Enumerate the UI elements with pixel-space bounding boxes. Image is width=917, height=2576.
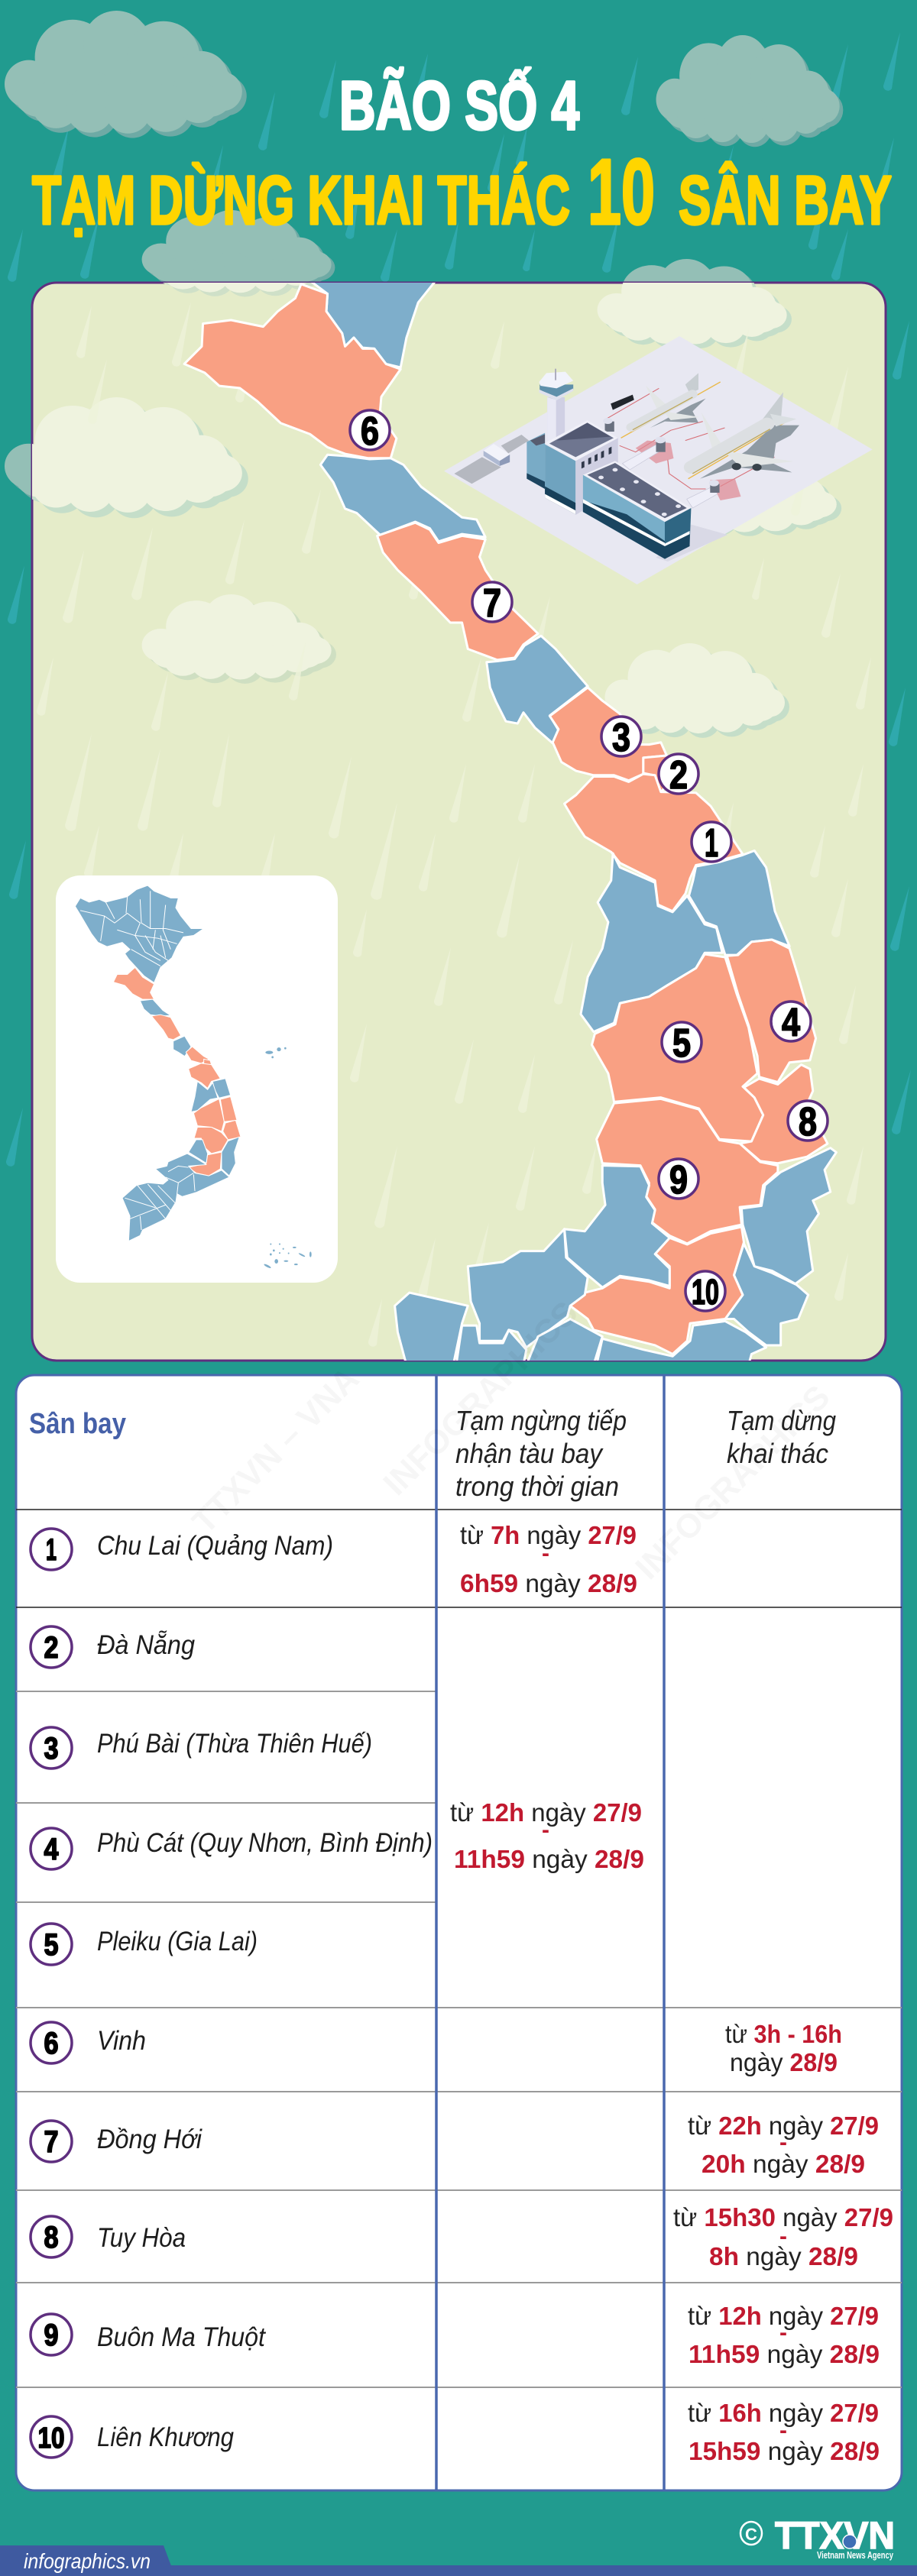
row 8: Tuy Hòa bbox=[97, 2223, 186, 2253]
row 7 bbox=[31, 2121, 203, 2162]
row 2: 2 bbox=[44, 1631, 58, 1665]
badge 7 bbox=[472, 581, 512, 626]
cloud: top left bbox=[5, 11, 247, 138]
badge 4 bbox=[771, 1001, 811, 1045]
badge 3 bbox=[601, 716, 641, 760]
row 4: Phù Cát (Quy Nhơn, Bình Định) bbox=[97, 1828, 433, 1858]
time: Dong Hoi: - bbox=[779, 2130, 787, 2155]
inset Quang Tri bbox=[173, 1036, 191, 1057]
table watermarks bbox=[185, 1294, 838, 1587]
time: Lien Khuong: - bbox=[779, 2418, 787, 2443]
title bbox=[32, 66, 892, 244]
row 5: 5 bbox=[44, 1928, 58, 1962]
inset north blue bbox=[75, 885, 204, 982]
badge 9: 9 bbox=[669, 1158, 688, 1202]
row 1: 1 bbox=[46, 1533, 57, 1567]
teal rain drops bbox=[6, 32, 911, 1167]
inset Spratly islands bbox=[264, 1243, 312, 1269]
time: Buon Ma Thuot: 11h59 ngày 28/9 bbox=[689, 2340, 880, 2368]
header: column 2 bbox=[455, 1405, 627, 1502]
small building bbox=[484, 444, 510, 466]
province blue Kon Tum bbox=[581, 853, 722, 1032]
airport illustration bbox=[444, 336, 873, 584]
jet bridges bbox=[622, 443, 718, 508]
time: Dong Hoi: 20h ngày 28/9 bbox=[702, 2150, 865, 2178]
inset Hue bbox=[186, 1047, 209, 1063]
inset Lam Dong bbox=[189, 1152, 222, 1176]
province orange Gia Lai bbox=[591, 954, 763, 1141]
copyright mark bbox=[740, 2522, 762, 2545]
badge 6 bbox=[350, 409, 390, 454]
time: Vinh bbox=[725, 2020, 842, 2076]
time: group of four airports: từ 12h ngày 27/9 bbox=[450, 1798, 642, 1827]
row 9: 9 bbox=[44, 2319, 58, 2352]
inset Nghe An bbox=[113, 967, 154, 999]
bus bbox=[611, 395, 634, 410]
airport apron bbox=[444, 336, 873, 584]
parking strips bbox=[501, 435, 529, 453]
inset: Vietnam overview map bbox=[56, 875, 338, 1283]
time: Chu Lai: 6h59 ngày 28/9 bbox=[460, 1569, 637, 1597]
row 6 bbox=[31, 2022, 146, 2063]
province orange Lam Dong bbox=[570, 1227, 744, 1354]
row 4: 4 bbox=[44, 1833, 59, 1866]
time: Lien Khuong bbox=[688, 2399, 880, 2465]
header: column 3: Tạm dừng bbox=[727, 1405, 836, 1436]
time: Chu Lai bbox=[460, 1521, 637, 1597]
province orange Nghe An bbox=[184, 284, 400, 458]
logo wordmark: TTXVN bbox=[775, 2514, 895, 2557]
inset Gia Lai bbox=[193, 1099, 224, 1131]
badge 1: 1 bbox=[705, 821, 718, 866]
lower provinces bbox=[395, 688, 836, 1365]
panel: map background bbox=[32, 283, 886, 1361]
time: Buon Ma Thuot bbox=[688, 2302, 880, 2368]
province blue Quang Ngai bbox=[689, 851, 789, 955]
header: column 2: nhận tàu bay bbox=[455, 1438, 604, 1469]
row 8: 8 bbox=[44, 2221, 58, 2254]
inset Dak Lak bbox=[194, 1127, 228, 1154]
clouds inside the map panel bbox=[5, 210, 841, 738]
title line 2: 10 bbox=[588, 140, 655, 244]
time: Dong Hoi bbox=[688, 2112, 879, 2178]
title line 2: TẠM DỪNG KHAI THÁC bbox=[32, 162, 570, 239]
red hatched zones bbox=[636, 441, 740, 500]
header: column 2: trong thời gian bbox=[455, 1471, 619, 1502]
province blue Binh Thuan bbox=[725, 1244, 808, 1345]
province blue Thanh Hoa bbox=[310, 280, 436, 367]
title line 2 bbox=[32, 140, 892, 244]
header: column 3: khai thác bbox=[727, 1438, 828, 1469]
row 9 bbox=[31, 2314, 266, 2355]
inset Phu Yen bbox=[223, 1120, 241, 1140]
province orange Quang Nam bbox=[565, 774, 743, 911]
inset Da Nang bbox=[204, 1059, 212, 1065]
row 10: Liên Khương bbox=[97, 2422, 234, 2452]
badge 5 bbox=[662, 1021, 702, 1066]
time: Chu Lai: từ 7h ngày 27/9 bbox=[460, 1521, 637, 1549]
row 8 bbox=[31, 2216, 186, 2257]
badge 2 bbox=[659, 753, 698, 798]
province blue Ha Tinh bbox=[320, 455, 485, 542]
province blue Binh Duong bbox=[456, 1325, 527, 1365]
province blue Binh Phuoc bbox=[468, 1229, 588, 1348]
inset Kon Tum bbox=[191, 1081, 218, 1112]
table watermarks: INFOGRAPHICS bbox=[628, 1378, 838, 1587]
time: Vinh: từ 3h - 16h bbox=[725, 2020, 842, 2048]
province orange Da Nang bbox=[642, 755, 668, 791]
row 9: Buôn Ma Thuột bbox=[97, 2322, 266, 2352]
row 6: 6 bbox=[44, 2027, 58, 2060]
province blue Dong Nai bbox=[527, 1319, 602, 1365]
table watermarks: TTXVN – VNA bbox=[185, 1360, 366, 1541]
row 3: 3 bbox=[44, 1732, 58, 1765]
table lines bbox=[16, 1375, 902, 2490]
pale rain drops on map bbox=[37, 302, 871, 1347]
badge 5: 5 bbox=[672, 1021, 691, 1066]
badge 2: 2 bbox=[669, 753, 688, 798]
inset Dak Nong bbox=[189, 1140, 208, 1163]
cloud: near province 3 bbox=[605, 643, 789, 738]
long terminal block bbox=[583, 461, 691, 559]
row 3 bbox=[31, 1727, 372, 1769]
table row numbers and airport names bbox=[31, 1529, 433, 2458]
control tower bbox=[539, 369, 573, 445]
province orange Binh Dinh bbox=[727, 940, 816, 1083]
cloud: lower left of map bbox=[142, 594, 336, 684]
map number badges bbox=[350, 409, 828, 1312]
time: Tuy Hoa: 8h ngày 28/9 bbox=[709, 2242, 858, 2270]
time: Buon Ma Thuot: - bbox=[779, 2320, 787, 2345]
inset Binh Dinh bbox=[220, 1096, 237, 1121]
plane 1 bbox=[631, 373, 706, 430]
copyright mark: C bbox=[745, 2525, 757, 2544]
time: Buon Ma Thuot: từ 12h ngày 27/9 bbox=[688, 2302, 879, 2330]
time: Dong Hoi: từ 22h ngày 27/9 bbox=[688, 2112, 879, 2140]
province blue Dak Nong bbox=[565, 1166, 669, 1287]
time: Vinh: ngày 28/9 bbox=[730, 2048, 838, 2076]
inset Khanh Hoa bbox=[222, 1137, 239, 1176]
badge 6: 6 bbox=[361, 409, 379, 454]
row 2: Đà Nẵng bbox=[97, 1630, 195, 1660]
province blue Quang Tri bbox=[487, 636, 588, 743]
row 5: Pleiku (Gia Lai) bbox=[97, 1927, 258, 1956]
time: group of four airports bbox=[450, 1798, 644, 1873]
cloud: under title, inside panel bbox=[163, 283, 314, 296]
province orange Dak Lak bbox=[597, 1099, 778, 1244]
column 3 times bbox=[673, 2020, 893, 2465]
cloud: left of map bbox=[32, 397, 248, 518]
row 5 bbox=[31, 1924, 258, 1965]
badge 8: 8 bbox=[799, 1100, 817, 1144]
time: group of four airports: - bbox=[542, 1817, 549, 1843]
row 2 bbox=[31, 1626, 195, 1668]
time: Chu Lai: - bbox=[542, 1541, 549, 1566]
badge 9 bbox=[659, 1158, 698, 1202]
time: Tuy Hoa: từ 15h30 ngày 27/9 bbox=[673, 2203, 893, 2231]
time: Lien Khuong: từ 16h ngày 27/9 bbox=[688, 2399, 879, 2427]
row 6: Vinh bbox=[97, 2026, 146, 2056]
row 1: Chu Lai (Quảng Nam) bbox=[97, 1531, 333, 1561]
time: Lien Khuong: 15h59 ngày 28/9 bbox=[689, 2437, 880, 2465]
cloud: under title bbox=[142, 210, 335, 296]
footer bar bbox=[0, 2545, 917, 2576]
row 4 bbox=[31, 1828, 433, 1869]
header: column 3 bbox=[727, 1405, 836, 1469]
province orange Quang Binh bbox=[377, 523, 538, 660]
cloud: left, part on teal bbox=[5, 397, 247, 516]
taxi lines bbox=[606, 388, 774, 489]
province blue Tay Ninh bbox=[395, 1293, 468, 1365]
logo: TTXVN bbox=[740, 2514, 895, 2561]
inset south blue bbox=[122, 1154, 229, 1241]
cloud: top right bbox=[656, 35, 843, 147]
time: Tuy Hoa: - bbox=[779, 2224, 787, 2249]
row 7: Đồng Hới bbox=[97, 2125, 203, 2154]
footer site name: infographics.vn bbox=[24, 2549, 151, 2573]
province orange Phu Yen bbox=[740, 1065, 828, 1163]
row 10 bbox=[31, 2416, 234, 2458]
cloud: top right of map bbox=[598, 283, 792, 348]
province blue Khanh Hoa bbox=[741, 1148, 836, 1284]
table watermarks: INFOGRAPHICS bbox=[376, 1294, 585, 1503]
clouds on the teal background bbox=[5, 11, 843, 516]
column 2 times bbox=[450, 1521, 644, 1873]
plane 2 bbox=[691, 392, 799, 479]
row 7: 7 bbox=[44, 2125, 58, 2159]
time: group of four airports: 11h59 ngày 28/9 bbox=[454, 1845, 644, 1873]
inset Ha Tinh bbox=[140, 999, 170, 1016]
cloud: behind airport bbox=[725, 481, 842, 536]
map of central Vietnam provinces bbox=[184, 280, 836, 1365]
inset Quang Nam bbox=[189, 1063, 220, 1089]
logo globe bbox=[843, 2535, 857, 2548]
panel: airport table bbox=[16, 1294, 902, 2490]
low block bbox=[527, 433, 545, 489]
inset Quang Binh bbox=[151, 1015, 181, 1040]
inset Paracel islands bbox=[265, 1047, 287, 1058]
badge 7: 7 bbox=[483, 581, 501, 626]
inset Quang Ngai bbox=[212, 1079, 231, 1098]
province orange Thua Thien Hue bbox=[549, 688, 666, 781]
time: Tuy Hoa bbox=[673, 2203, 893, 2270]
badge 4: 4 bbox=[782, 1001, 800, 1045]
badge 1 bbox=[692, 821, 731, 866]
table header bbox=[29, 1405, 836, 1502]
badge 8 bbox=[788, 1100, 828, 1144]
row 1 bbox=[31, 1529, 333, 1570]
title line 1: BÃO SỐ 4 bbox=[339, 66, 579, 144]
header: column 2: Tạm ngừng tiếp bbox=[455, 1405, 627, 1436]
badge 3: 3 bbox=[612, 716, 630, 760]
main terminal block bbox=[545, 420, 618, 515]
province blue Ba Ria bbox=[597, 1321, 766, 1365]
badge 10: 10 bbox=[692, 1272, 719, 1312]
row 10: 10 bbox=[38, 2422, 64, 2455]
header: Sân bay: Sân bay bbox=[29, 1408, 126, 1440]
cloud: top of map, part on teal bbox=[598, 259, 790, 348]
row 3: Phú Bài (Thừa Thiên Huế) bbox=[97, 1729, 372, 1759]
